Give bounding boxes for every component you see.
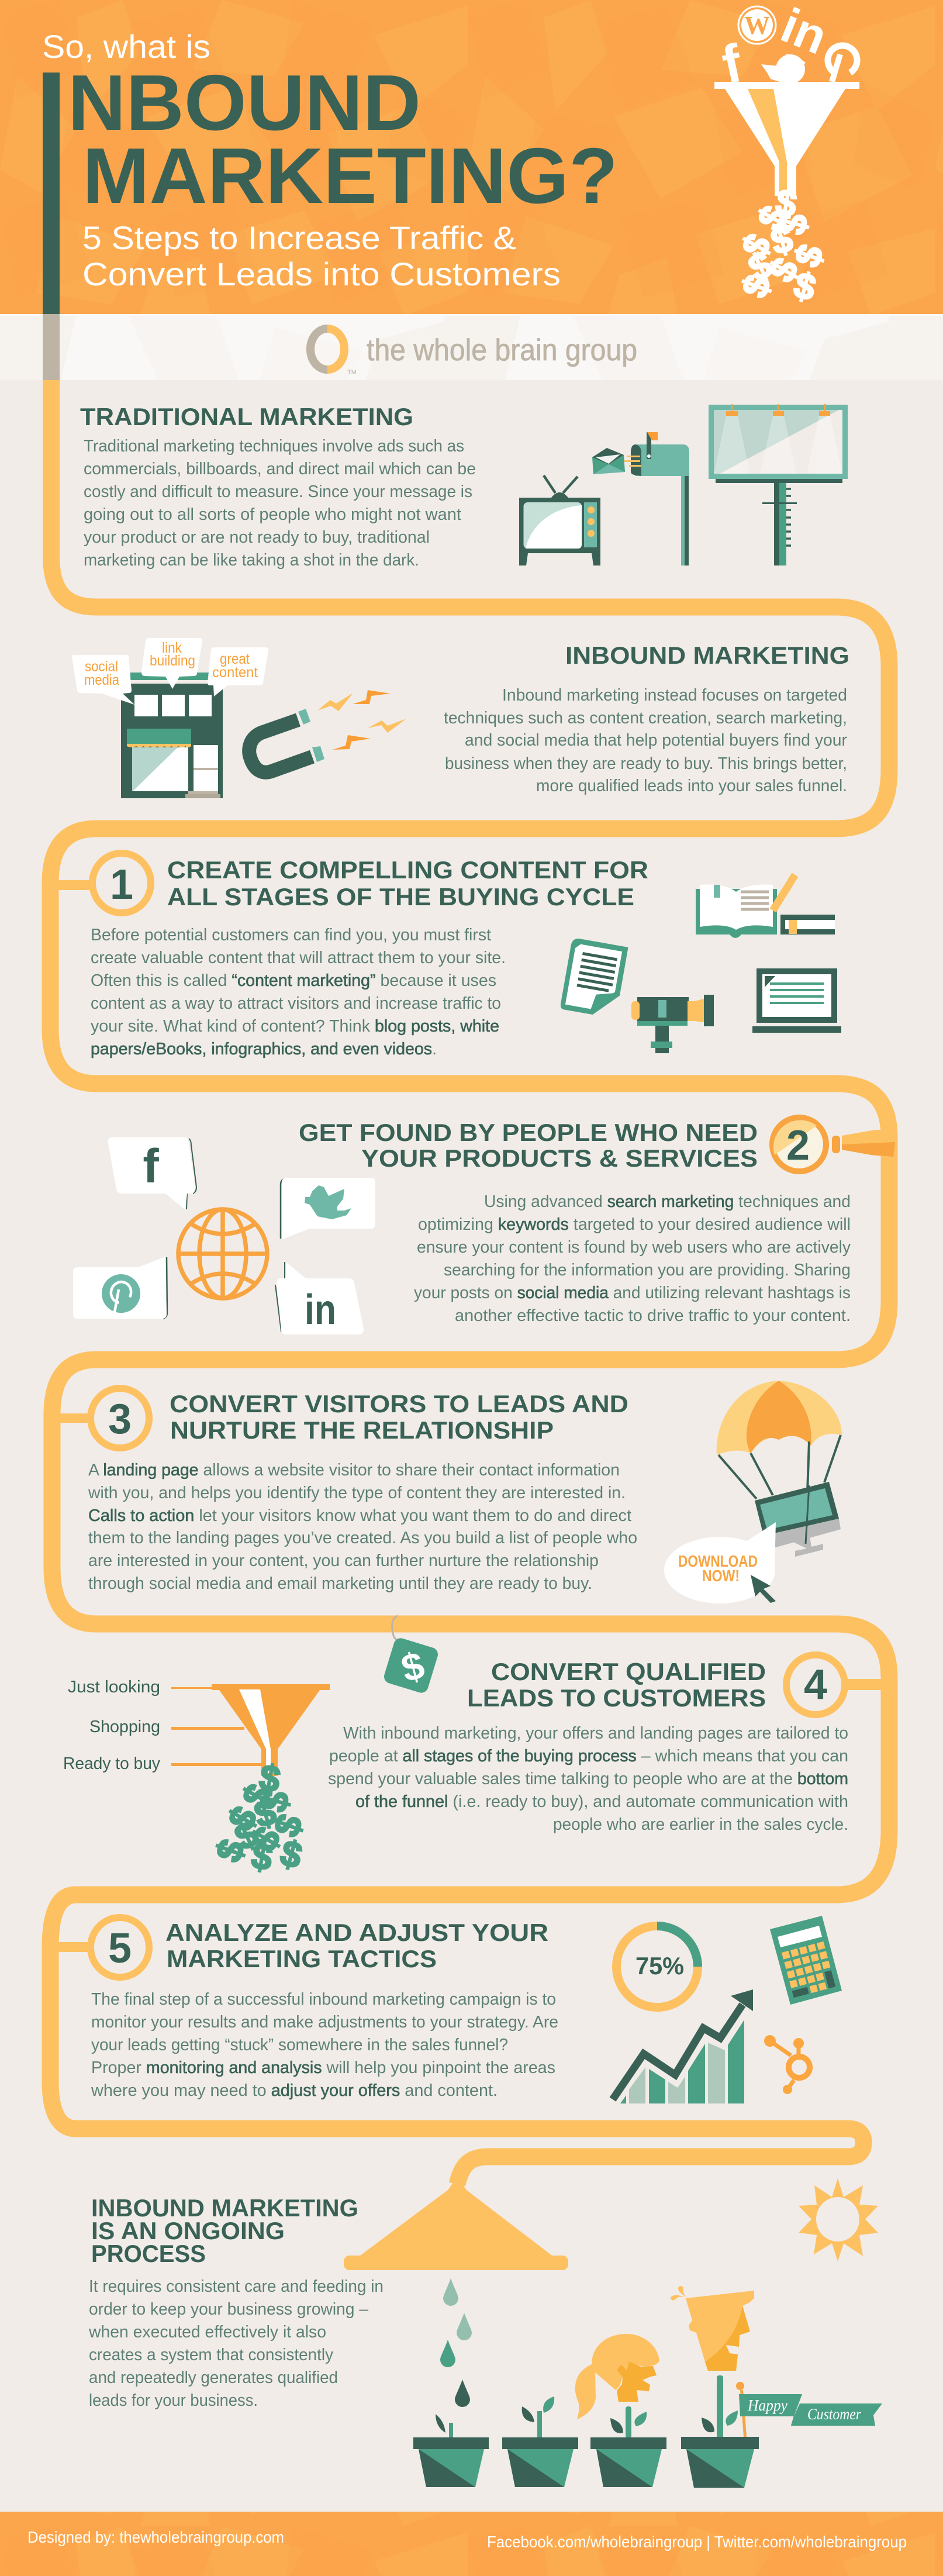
callout: great content: content [212, 664, 258, 681]
panel: ongoing process [88, 2178, 882, 2488]
chart: 75% donut: 75% [635, 1952, 684, 1980]
heading: INBOUND MARKETING [565, 642, 849, 669]
body text: It requires consistent care and feeding in [89, 2277, 384, 2296]
icon: white funnel with social icons and dollars: $ [750, 199, 795, 237]
icon: white funnel with social icons and dollars: $ [742, 244, 778, 289]
body text: A landing page allows a website visitor to share their contact information [88, 1461, 620, 1480]
icon: plant pots [413, 2375, 759, 2488]
body text: leads for your business. [89, 2391, 258, 2410]
body text: create valuable content that will attract them to your site. [91, 949, 506, 967]
body text [414, 1192, 851, 1325]
callout: download now [664, 1522, 776, 1603]
step number 3 [60, 1388, 149, 1448]
chart: sales funnel stages: Shopping [89, 1718, 160, 1736]
body text: Inbound marketing instead focuses on targeted [502, 686, 847, 705]
body text [84, 437, 476, 570]
body text: more qualified leads into your sales funnel. [536, 777, 847, 795]
icon: video camera [631, 995, 714, 1053]
body text: optimizing keywords targeted to your desired audience will [418, 1215, 851, 1234]
body text: your product or are not ready to buy, traditional [84, 528, 430, 547]
heading: CREATE COMPELLING CONTENT FOR [167, 856, 648, 884]
body text: with you, and helps you identify the type of content they are interested in. [88, 1484, 626, 1502]
body text: techniques such as content creation, search marketing, [444, 709, 847, 727]
title: 5 Steps to Increase Traffic & [82, 219, 516, 256]
body text: business when they are ready to buy. This brings better, [445, 754, 847, 773]
icon: woman head [575, 2334, 659, 2419]
header vertical bar [43, 73, 60, 380]
heading [299, 1119, 758, 1172]
body text: searching for the information you are providing. Sharing [444, 1261, 851, 1280]
step number 4 [786, 1655, 881, 1715]
step number 2 with magnifying glass [772, 1118, 895, 1171]
heading [170, 1390, 628, 1444]
body text: another effective tactic to drive traffic to your content. [455, 1306, 851, 1325]
body text: your posts on social media and utilizing relevant hashtags is [414, 1284, 851, 1302]
chart: sales funnel stages: Just looking [68, 1678, 160, 1696]
chart: sales funnel stages: $ [266, 1809, 311, 1842]
panel: step 4 [63, 1616, 881, 1878]
chart: sales funnel stages: $ [248, 1836, 275, 1878]
banner: happy customer flag: Customer [807, 2405, 861, 2423]
body text: creates a system that consistently [89, 2346, 333, 2364]
chart: sales funnel stages: $ [257, 1757, 283, 1801]
step number 1 [58, 853, 151, 913]
body text: content as a way to attract visitors and increase traffic to [91, 994, 501, 1013]
icon: water drops [440, 2278, 472, 2407]
chart: sales funnel stages: $ [220, 1800, 265, 1837]
callout: link building: link [162, 640, 182, 656]
body text [328, 1724, 848, 1834]
chart: sales funnel stages: $ [244, 1820, 289, 1858]
icon: billboard [709, 404, 848, 565]
icon: white funnel with social icons and dollars: W [744, 11, 770, 40]
callout: social media: social [85, 658, 118, 675]
icon: white funnel with social icons and dollars: $ [734, 270, 779, 303]
header banner [0, 0, 943, 380]
icon: white funnel with social icons and dollars: $ [762, 251, 807, 289]
body text: Before potential customers can find you, you must first [91, 926, 491, 944]
heading: LEADS TO CUSTOMERS [467, 1684, 766, 1712]
title: NBOUND [68, 58, 421, 147]
body text: marketing can be like taking a shot in the dark. [84, 551, 419, 570]
icon: facebook bubble: f [143, 1140, 159, 1193]
icon: white funnel with social icons and dollars: $ [772, 209, 816, 239]
pot 1 [413, 2414, 489, 2487]
body text: spend your valuable sales time talking to people who are at the bottom [328, 1770, 848, 1788]
body text: of the funnel (i.e. ready to buy), and automate communication with [355, 1792, 848, 1811]
icon: parachute with monitor [717, 1381, 842, 1557]
chart: sales funnel stages: $ [250, 1792, 280, 1836]
body text [88, 1461, 637, 1593]
heading: TRADITIONAL MARKETING [80, 403, 413, 430]
chart: sales funnel stages: $ [208, 1834, 253, 1867]
pot 2 [502, 2396, 578, 2487]
title: Convert Leads into Customers [82, 256, 561, 292]
icon: document [559, 937, 628, 1019]
body text: your leads getting “stuck” somewhere in the sales funnel? [91, 2036, 508, 2054]
body text: and repeatedly generates qualified [89, 2368, 338, 2387]
title: MARKETING? [82, 132, 618, 220]
footer: Facebook.com/wholebraingroup | Twitter.com/wholebraingroup [487, 2533, 907, 2551]
chart: sales funnel stages: $ [234, 1778, 279, 1815]
pot 3 [590, 2406, 666, 2487]
heading: CONVERT VISITORS TO LEADS AND [170, 1390, 628, 1418]
body text: going out to all sorts of people who might not want [84, 505, 461, 524]
body text: are interested in your content, you can further nurture the relationship [88, 1551, 599, 1570]
panel: step 1 [58, 853, 841, 1058]
icon: magnet [249, 690, 406, 773]
icon: open book and pencil [696, 875, 835, 938]
icon: white funnel with social icons and dollars [714, 0, 862, 309]
step number 1: 1 [110, 861, 133, 908]
body text: With inbound marketing, your offers and landing pages are tailored to [343, 1724, 848, 1743]
pot 4 [681, 2375, 759, 2488]
icon: television [519, 475, 600, 565]
heading: ALL STAGES OF THE BUYING CYCLE [167, 883, 634, 911]
heading: PROCESS [91, 2240, 206, 2267]
icon: calculator [770, 1916, 842, 2005]
body text: monitor your results and make adjustments to your strategy. Are [91, 2013, 558, 2032]
step number 2 with magnifying glass: 2 [786, 1122, 810, 1169]
body text: The final step of a successful inbound marketing campaign is to [91, 1990, 556, 2009]
title: So, what is [42, 28, 210, 65]
icon: sun [799, 2178, 878, 2261]
heading: CONVERT QUALIFIED [491, 1658, 766, 1685]
body text: papers/eBooks, infographics, and even videos. [91, 1040, 437, 1058]
icon: white funnel with social icons and dollars: $ [767, 219, 797, 263]
chart: rising arrow with bars [613, 1989, 753, 2103]
body text: and social media that help potential buyers find your [465, 731, 847, 750]
body text [91, 926, 506, 1058]
icon: hubspot sprocket [764, 2035, 810, 2094]
body text: Traditional marketing techniques involve ads such as [84, 437, 464, 456]
body text [88, 2277, 384, 2410]
winding path [50, 380, 889, 2184]
icon: white funnel with social icons and dollars: $ [773, 182, 800, 225]
body text: commercials, billboards, and direct mail which can be [84, 460, 476, 478]
icon: shower head [344, 2177, 568, 2270]
callout: download now: DOWNLOAD [678, 1552, 758, 1570]
heading [165, 1919, 548, 1972]
footer [0, 2512, 943, 2576]
chart: 75% donut [616, 1926, 698, 2007]
heading: MARKETING TACTICS [167, 1945, 437, 1972]
heading: IS AN ONGOING [91, 2217, 285, 2244]
icon: white funnel with social icons and dollars: $ [734, 227, 779, 265]
callout: link building [141, 638, 202, 689]
body text: people at all stages of the buying process – which means that you can [329, 1747, 848, 1765]
step number 5 [58, 1918, 149, 1977]
banner: happy customer flag: Happy [747, 2396, 787, 2414]
logo band: TM [347, 369, 357, 376]
icon: pinterest bubble [73, 1257, 167, 1319]
body text: them to the landing pages you’ve created. As you build a list of people who [88, 1529, 637, 1547]
callout: social media: media [84, 672, 119, 688]
heading: ANALYZE AND ADJUST YOUR [165, 1919, 548, 1946]
panel: inbound marketing [72, 638, 849, 798]
heading: YOUR PRODUCTS & SERVICES [361, 1144, 758, 1172]
icon: twitter bubble [281, 1178, 375, 1239]
heading [467, 1658, 766, 1712]
footer: Designed by: thewholebraingroup.com [27, 2528, 284, 2546]
icon: price tag [382, 1616, 440, 1695]
callout: download now: NOW! [702, 1567, 740, 1585]
heading [91, 2194, 358, 2267]
body text: Proper monitoring and analysis will help you pinpoint the areas [91, 2058, 555, 2077]
icon: mailbox and envelope [592, 432, 689, 565]
chart: sales funnel stages: $ [229, 1813, 264, 1858]
chart: sales funnel stages [63, 1678, 330, 1878]
heading: INBOUND MARKETING [91, 2194, 358, 2222]
chart: sales funnel stages: Ready to buy [63, 1754, 160, 1773]
heading: NURTURE THE RELATIONSHIP [170, 1416, 554, 1444]
title [42, 28, 618, 292]
icon: white funnel with social icons and dollars: f [717, 33, 747, 95]
icon: man head [671, 2286, 754, 2371]
callout: great content: great [220, 651, 250, 667]
panel: traditional marketing [80, 403, 848, 570]
chart: sales funnel stages: $ [254, 1786, 298, 1816]
body text: your site. What kind of content? Think blog posts, white [91, 1017, 499, 1036]
body text: costly and difficult to measure. Since your message is [84, 482, 472, 501]
panel: step 5 [58, 1916, 842, 2103]
panel: step 3 [60, 1381, 842, 1603]
body text [444, 686, 847, 795]
logo band [0, 314, 943, 380]
heading [167, 856, 648, 911]
callout: link building: building [150, 653, 195, 669]
icon: price tag: $ [397, 1643, 429, 1690]
body text [91, 1990, 558, 2100]
body text: people who are earlier in the sales cycle. [553, 1815, 848, 1834]
callout: great content [208, 647, 268, 696]
icon: facebook bubble [108, 1137, 196, 1210]
body text: through social media and email marketing until they are ready to buy. [88, 1574, 592, 1593]
body text: when executed effectively it also [88, 2323, 326, 2341]
body text: Calls to action let your visitors know what you want them to do and direct [88, 1506, 631, 1525]
step number 5: 5 [108, 1925, 132, 1972]
icon: globe [178, 1209, 267, 1298]
icon: white funnel with social icons and dollars: $ [790, 265, 820, 309]
body text: Using advanced search marketing techniques and [484, 1192, 851, 1211]
body text: where you may need to adjust your offers and content. [91, 2081, 498, 2100]
step number 3: 3 [108, 1396, 132, 1443]
step number 4: 4 [804, 1661, 827, 1708]
body text: ensure your content is found by web users who are actively [417, 1238, 851, 1257]
logo band: the whole brain group [367, 333, 637, 367]
panel: step 2 [73, 1118, 895, 1334]
icon: linkedin bubble: in [305, 1287, 336, 1333]
banner: happy customer flag [736, 2382, 882, 2437]
icon: white funnel with social icons and dollars: $ [787, 240, 832, 273]
icon: laptop [752, 968, 841, 1033]
chart: sales funnel stages: $ [277, 1833, 306, 1877]
icon: storefront [72, 638, 268, 798]
callout: social media [72, 655, 134, 705]
heading: GET FOUND BY PEOPLE WHO NEED [299, 1119, 758, 1146]
icon: linkedin bubble [275, 1262, 364, 1334]
body text: order to keep your business growing – [89, 2300, 369, 2319]
body text: Often this is called “content marketing” because it uses [91, 971, 496, 990]
